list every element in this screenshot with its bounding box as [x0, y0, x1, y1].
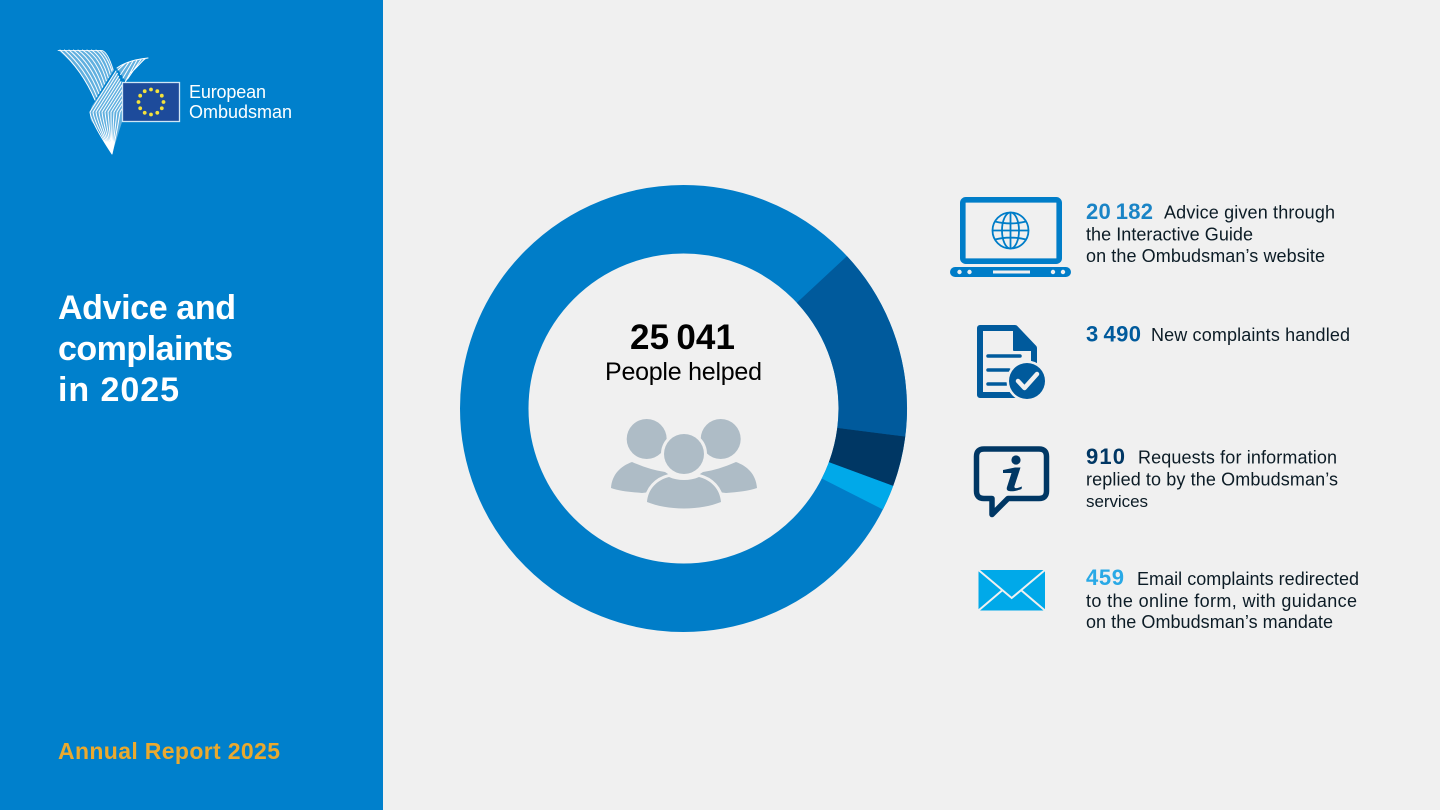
text: 459 email complaints: to the online form, with guidance	[1086, 591, 1357, 611]
icon: laptop with globe	[950, 200, 1071, 277]
heading: complaints	[58, 330, 233, 368]
logo bird mark	[58, 50, 148, 154]
text: 910 requests: 910	[1086, 444, 1125, 469]
heading	[58, 289, 236, 409]
icon: people	[611, 419, 757, 508]
donut centre total: 25 041	[630, 318, 735, 357]
text: 20 182 advice: 20 182	[1086, 199, 1153, 224]
text: 20 182 advice	[1086, 199, 1335, 266]
text: 910 requests	[1086, 444, 1338, 511]
text: 459 email complaints: Email complaints redirected	[1137, 569, 1359, 589]
icon: document with check	[980, 328, 1048, 402]
logo wordmark	[189, 82, 292, 122]
text: 3 490 complaints	[1086, 322, 1350, 346]
item: advice via Interactive Guide	[950, 199, 1335, 277]
text: 910 requests: replied to by the Ombudsman’s	[1086, 470, 1338, 490]
text: 910 requests: Requests for information	[1138, 448, 1337, 468]
heading: Advice and	[58, 289, 236, 327]
text: 459 email complaints	[1086, 565, 1359, 632]
item: new complaints	[980, 322, 1350, 402]
icon: speech bubble with i	[976, 449, 1046, 514]
logo wordmark: Ombudsman	[189, 102, 292, 122]
text: 20 182 advice: Advice given through	[1164, 202, 1335, 222]
logo: European Ombudsman	[58, 50, 292, 154]
text: 3 490 complaints: New complaints handled	[1151, 325, 1350, 345]
text: 459 email complaints: on the Ombudsman’s mandate	[1086, 612, 1333, 632]
logo wordmark: European	[189, 82, 266, 102]
text: 20 182 advice: on the Ombudsman’s website	[1086, 246, 1325, 266]
footer label: Annual Report 2025	[58, 738, 280, 764]
donut centre total: People helped	[605, 358, 762, 386]
item: email complaints	[978, 565, 1359, 632]
donut centre total	[605, 318, 762, 386]
item: requests for information	[976, 444, 1338, 514]
EU flag	[122, 82, 180, 122]
text: 459 email complaints: 459	[1086, 565, 1124, 590]
donut chart	[416, 141, 951, 676]
text: 20 182 advice: the Interactive Guide	[1086, 224, 1253, 244]
icon: envelope	[978, 570, 1045, 610]
heading: in 2025	[58, 371, 179, 409]
text: 910 requests: services	[1086, 492, 1148, 511]
text: 3 490 complaints: 3 490	[1086, 322, 1141, 346]
panel: left sidebar	[0, 0, 383, 810]
